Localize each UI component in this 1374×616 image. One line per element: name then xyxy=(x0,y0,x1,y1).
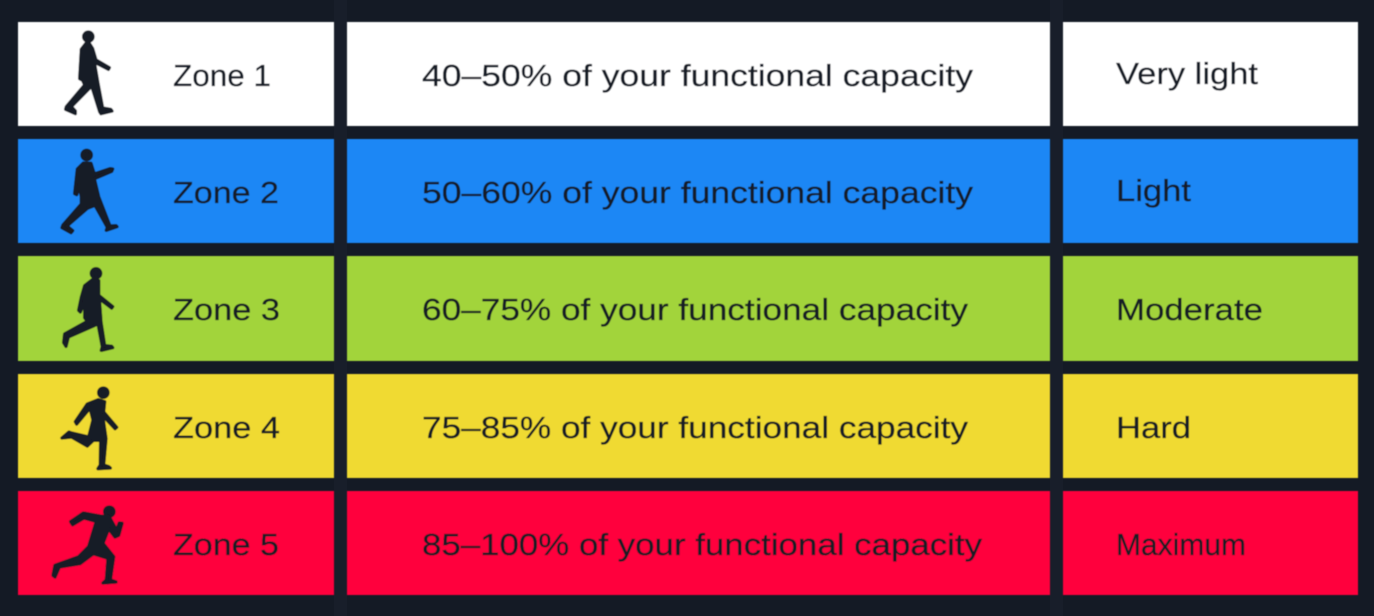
icon: running person, zone 4 xyxy=(62,388,117,469)
zone 5 label: Zone 5 xyxy=(173,527,279,562)
zone 2 capacity cell xyxy=(347,139,1050,243)
zone 5 intensity text: Maximum xyxy=(1116,527,1246,562)
zone 5 capacity text: 85–100% of your functional capacity xyxy=(422,527,983,562)
zone 4 intensity cell xyxy=(1063,374,1358,478)
row: zone 1 xyxy=(18,22,1358,126)
zone 4 capacity cell xyxy=(347,374,1050,478)
row: zone 3 xyxy=(18,256,1358,361)
zone 3 intensity text: Moderate xyxy=(1116,292,1263,327)
zone 2 label: Zone 2 xyxy=(173,175,279,210)
zone 3 label: Zone 3 xyxy=(173,292,280,327)
zone 2 capacity text: 50–60% of your functional capacity xyxy=(422,175,974,210)
icon: jogging person, zone 3 xyxy=(64,269,113,350)
row: zone 5 xyxy=(18,491,1358,595)
zone 1 intensity text: Very light xyxy=(1116,56,1258,91)
zone 3 capacity cell xyxy=(347,256,1050,361)
zone 4 intensity text: Hard xyxy=(1116,410,1191,445)
zone 1 cell xyxy=(18,22,334,126)
row: zone 4 xyxy=(18,374,1358,478)
zone 5 intensity cell xyxy=(1063,491,1358,595)
zone 1 intensity cell xyxy=(1063,22,1358,126)
zone 1 capacity cell xyxy=(347,22,1050,126)
zone 3 intensity cell xyxy=(1063,256,1358,361)
zone 2 cell xyxy=(18,139,334,243)
row: zone 2 xyxy=(18,139,1358,243)
zone 2 intensity cell xyxy=(1063,139,1358,243)
icon: walking person, zone 2 xyxy=(62,150,117,233)
zone 4 cell xyxy=(18,374,334,478)
zone 2 intensity text: Light xyxy=(1116,173,1191,208)
icon: sprinting person, zone 5 xyxy=(53,507,122,583)
zone 1 label: Zone 1 xyxy=(173,58,271,93)
zone 4 capacity text: 75–85% of your functional capacity xyxy=(422,410,969,445)
zone 4 label: Zone 4 xyxy=(173,410,280,445)
zone 1 capacity text: 40–50% of your functional capacity xyxy=(422,58,974,93)
zone 3 capacity text: 60–75% of your functional capacity xyxy=(422,292,969,327)
zone 5 capacity cell xyxy=(347,491,1050,595)
zone 5 cell xyxy=(18,491,334,595)
zone 3 cell xyxy=(18,256,334,361)
icon: walking person, zone 1 xyxy=(66,32,112,114)
